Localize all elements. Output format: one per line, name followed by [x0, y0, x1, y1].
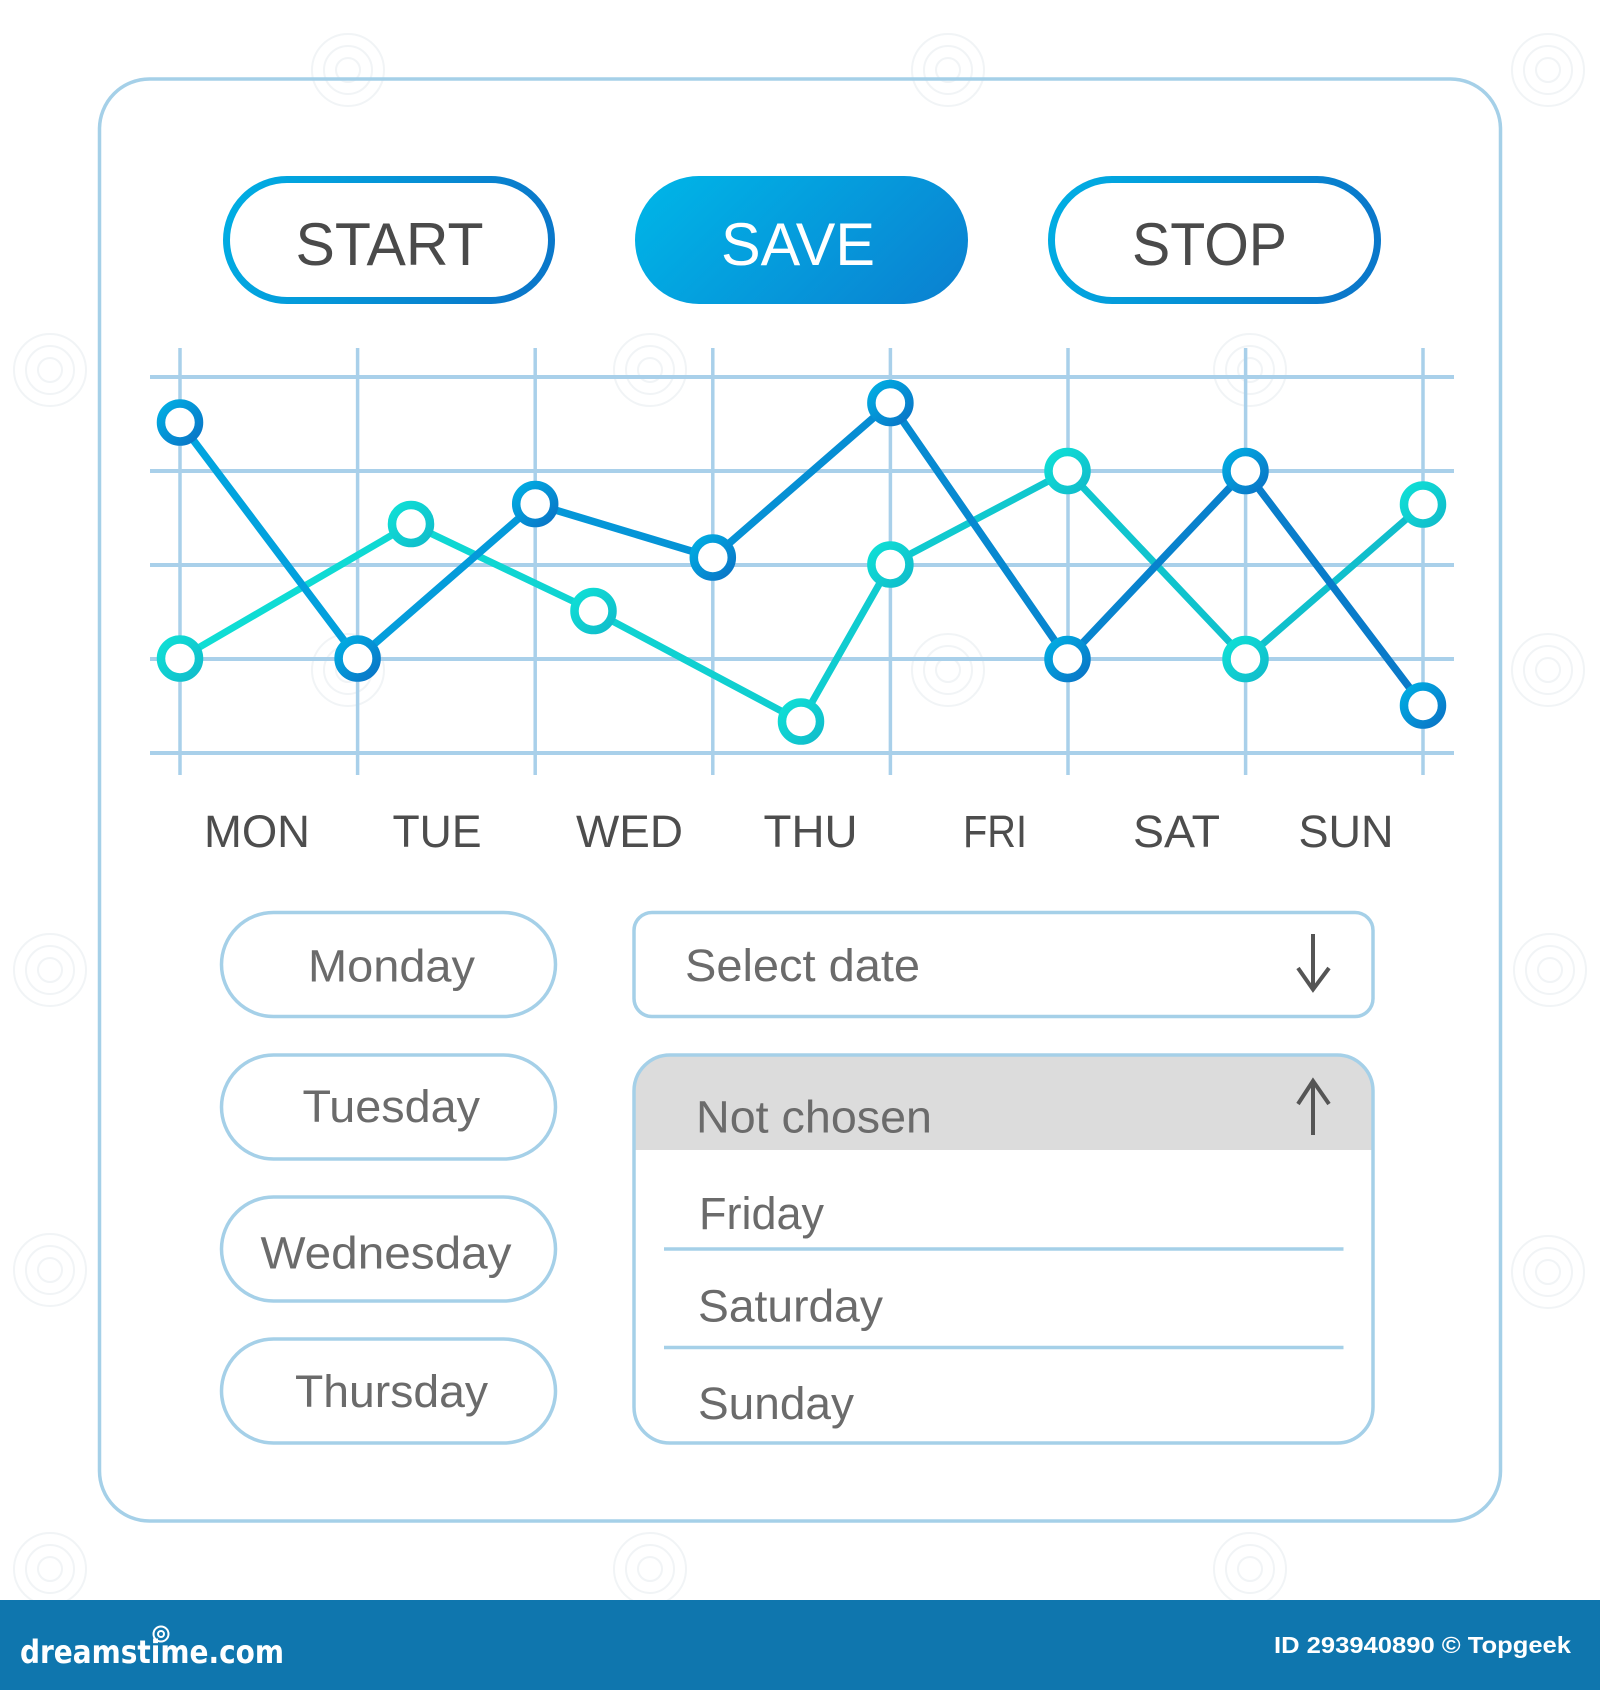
- dropdown header: not chosen: [634, 1055, 1373, 1150]
- chart axis labels: SAT: [1133, 806, 1220, 857]
- option: sunday: Sunday: [698, 1378, 855, 1429]
- icon: up arrow: [1298, 1081, 1329, 1135]
- chart axis labels: SUN: [1298, 806, 1394, 857]
- button: stop: [1052, 180, 1378, 300]
- pill: thursday: Thursday: [295, 1366, 489, 1417]
- pill: monday: Monday: [308, 940, 476, 992]
- dropdown list: [634, 1055, 1373, 1443]
- icon: logo spiral: [154, 1626, 168, 1642]
- dropdown header: not chosen: Not chosen: [696, 1092, 932, 1142]
- chart axis labels: THU: [764, 806, 858, 857]
- pill: thursday: [222, 1339, 556, 1443]
- button: start: START: [296, 211, 484, 278]
- pill: wednesday: Wednesday: [260, 1228, 512, 1278]
- chart axis labels: MON: [204, 806, 310, 857]
- button: save: [635, 176, 968, 304]
- series: blue line: [161, 384, 1442, 724]
- chart axis labels: WED: [576, 806, 683, 857]
- weekday pills: [222, 912, 556, 1443]
- option: friday: Friday: [699, 1188, 824, 1239]
- chart axis labels: TUE: [392, 806, 482, 857]
- pill: tuesday: [222, 1055, 556, 1159]
- date select field: Select date: [685, 940, 920, 991]
- pill: wednesday: [222, 1197, 556, 1301]
- footer bar: [0, 1600, 1600, 1690]
- chart axis labels: FRI: [963, 806, 1027, 857]
- button: save: SAVE: [721, 211, 875, 278]
- pill: monday: [222, 912, 556, 1016]
- option: saturday: Saturday: [698, 1280, 883, 1332]
- chart axis labels: [204, 806, 1394, 857]
- icon: down arrow: [1298, 934, 1329, 990]
- button: stop: STOP: [1132, 211, 1287, 278]
- footer logo text: dreamstime.com: [20, 1633, 284, 1671]
- pill: tuesday: Tuesday: [302, 1081, 481, 1132]
- button group: [226, 176, 1378, 304]
- footer image id: ID 293940890 © Topgeek: [1274, 1632, 1571, 1658]
- date select field: [634, 912, 1373, 1016]
- panel: dashboard card: [100, 79, 1500, 1521]
- series: teal line: [161, 452, 1442, 740]
- line chart: [150, 348, 1454, 775]
- button: start: [226, 180, 552, 300]
